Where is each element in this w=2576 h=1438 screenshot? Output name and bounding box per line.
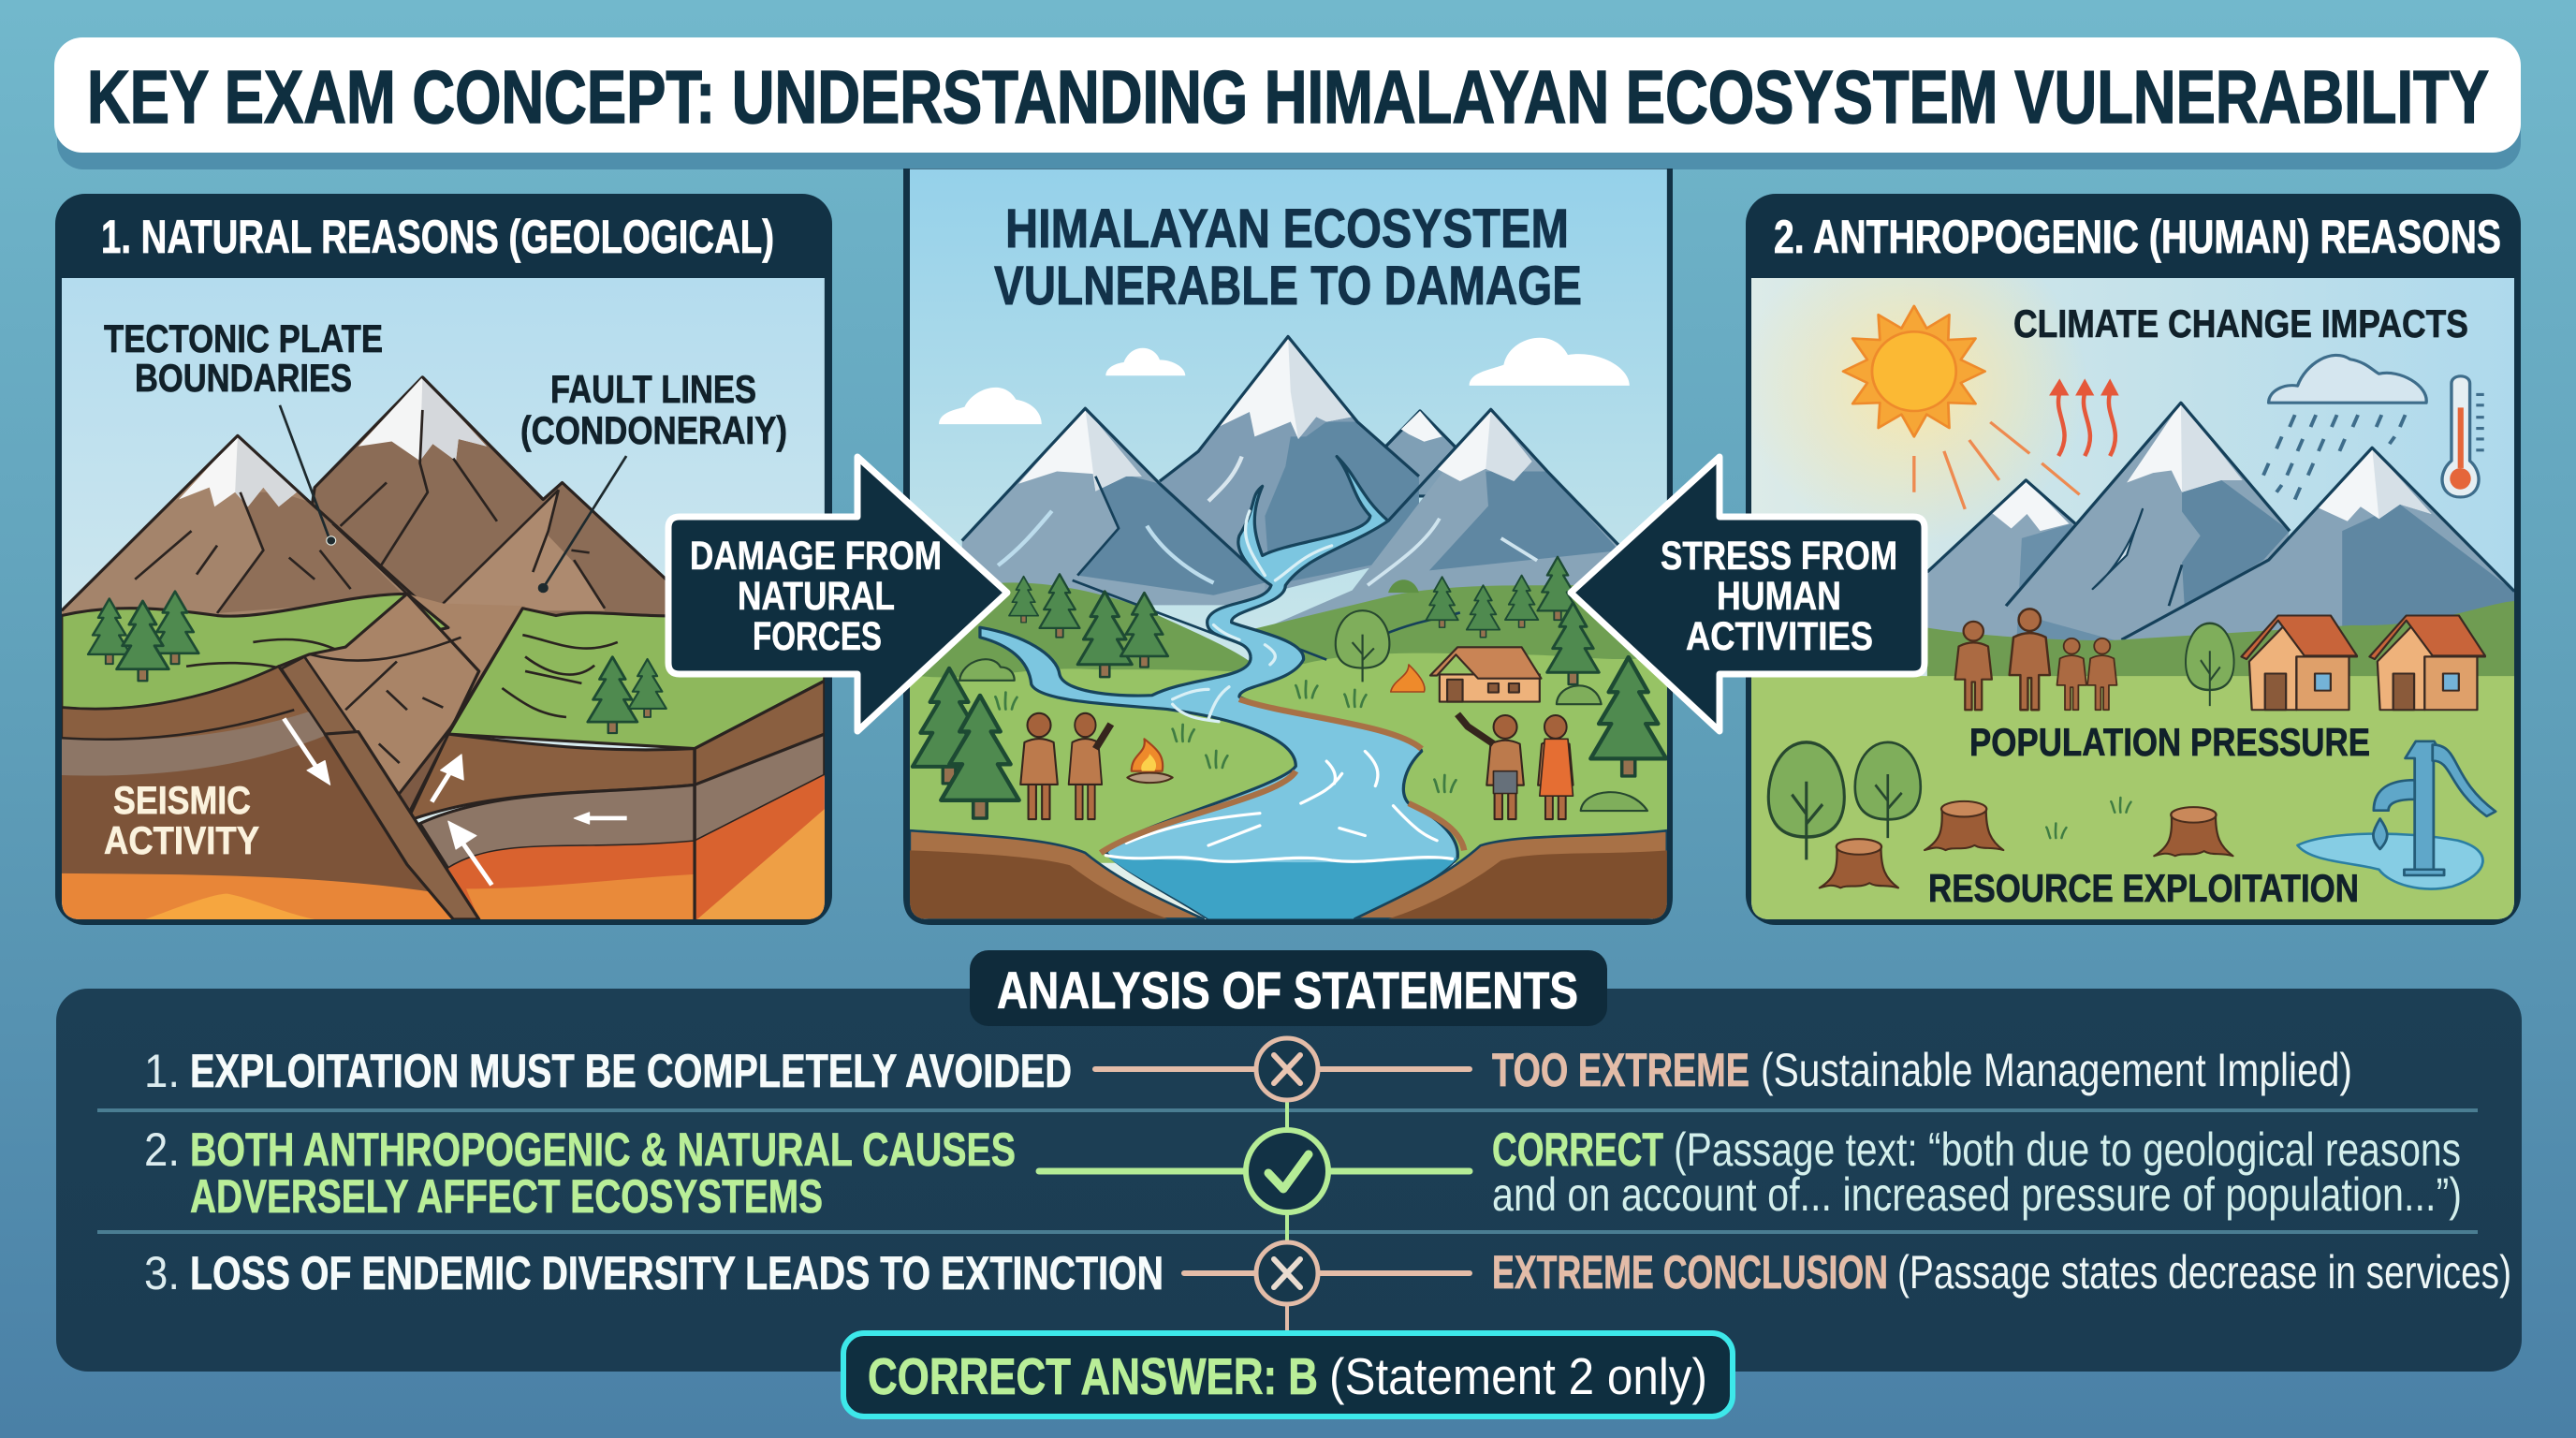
arrow: stress from human activities: HUMAN <box>1717 574 1841 619</box>
icon: house <box>1430 647 1541 702</box>
verdict 3: EXTREME CONCLUSION <box>1492 1246 1888 1299</box>
statement 2: 2. <box>144 1123 180 1176</box>
arrow: damage from natural forces: DAMAGE FROM <box>690 534 942 579</box>
centre heading <box>994 198 1582 316</box>
labels: natural reasons: TECTONIC PLATE <box>104 316 383 360</box>
correct answer box: (Statement 2 only) <box>1329 1347 1707 1405</box>
arrow: damage from natural forces <box>668 457 1007 731</box>
connector lines <box>1039 1069 1470 1333</box>
arrow: stress from human activities <box>1571 457 1925 731</box>
icon: water pump <box>2298 741 2496 888</box>
labels: anthropogenic reasons: RESOURCE EXPLOITATION <box>1928 866 2359 910</box>
statement 3: 3. <box>144 1247 180 1299</box>
centre heading: HIMALAYAN ECOSYSTEM <box>1005 198 1569 259</box>
arrow: damage from natural forces: FORCES <box>753 614 882 659</box>
illustration: human pressures <box>1741 227 2514 920</box>
labels: anthropogenic reasons: POPULATION PRESSURE <box>1969 720 2370 764</box>
verdict 2: CORRECT <box>1492 1123 1663 1176</box>
title banner <box>54 37 2521 169</box>
verdict 3 <box>1492 1246 2511 1299</box>
icon: sun <box>1843 306 2080 509</box>
icon: cross 1 <box>1256 1038 1318 1100</box>
heading tab: analysis of statements <box>970 950 1607 1026</box>
panel: analysis of statements <box>56 950 2522 1372</box>
callout lines <box>280 405 626 593</box>
labels: natural reasons <box>104 316 787 862</box>
illustration: geological cross section <box>62 278 825 919</box>
statement 1: 1. <box>144 1045 180 1097</box>
verdict 1 <box>1492 1044 2352 1096</box>
population group <box>1955 609 2116 710</box>
labels: natural reasons: ACTIVITY <box>104 818 259 862</box>
icon: cross 2 <box>1256 1242 1318 1304</box>
panel heading: natural reasons: 1. NATURAL REASONS (GEOLOGICAL) <box>101 211 774 263</box>
verdict 1: TOO EXTREME <box>1492 1044 1749 1096</box>
arrows: plate motion <box>284 719 627 885</box>
statement 3: LOSS OF ENDEMIC DIVERSITY LEADS TO EXTINCTION <box>190 1247 1164 1299</box>
icon: thermometer <box>2442 376 2484 497</box>
labels: natural reasons: SEISMIC <box>113 778 251 822</box>
labels: natural reasons: FAULT LINES <box>550 367 756 411</box>
ground banks <box>910 830 1204 918</box>
river <box>980 457 1457 918</box>
verdict 2 <box>1492 1123 2462 1221</box>
labels: natural reasons: BOUNDARIES <box>135 356 352 400</box>
verdict 1: (Sustainable Management Implied) <box>1761 1044 2352 1096</box>
arrow: stress from human activities: ACTIVITIES <box>1686 614 1873 659</box>
panel: natural reasons <box>55 194 832 925</box>
trees and stumps <box>1768 742 2232 888</box>
icon: check <box>1246 1130 1328 1212</box>
correct answer box <box>843 1333 1733 1416</box>
houses <box>2241 616 2485 710</box>
panel: anthropogenic reasons <box>1741 194 2521 925</box>
labels: anthropogenic reasons: CLIMATE CHANGE IMPACTS <box>2013 301 2468 345</box>
arrow: damage from natural forces: NATURAL <box>738 574 895 619</box>
labels: anthropogenic reasons <box>1928 301 2468 910</box>
icon: rain cloud <box>2263 355 2426 500</box>
panel: himalayan ecosystem centre <box>903 169 1673 925</box>
illustration: mountain valley and river <box>910 169 1667 919</box>
trees <box>913 557 1666 818</box>
statement 1: EXPLOITATION MUST BE COMPLETELY AVOIDED <box>190 1045 1072 1097</box>
labels: natural reasons: (CONDONERAIY) <box>520 408 787 452</box>
arrow: stress from human activities: STRESS FROM <box>1661 534 1897 579</box>
people and fire <box>995 665 1573 819</box>
icon: heat arrows <box>2049 378 2119 456</box>
statement 2: BOTH ANTHROPOGENIC & NATURAL CAUSES <box>190 1123 1016 1176</box>
centre heading: VULNERABLE TO DAMAGE <box>994 256 1582 316</box>
heading tab: analysis of statements: ANALYSIS OF STATEMENTS <box>997 961 1578 1020</box>
statement 2 <box>144 1123 1016 1223</box>
correct answer box: CORRECT ANSWER: B <box>868 1347 1318 1405</box>
statement 2: ADVERSELY AFFECT ECOSYSTEMS <box>190 1170 823 1223</box>
